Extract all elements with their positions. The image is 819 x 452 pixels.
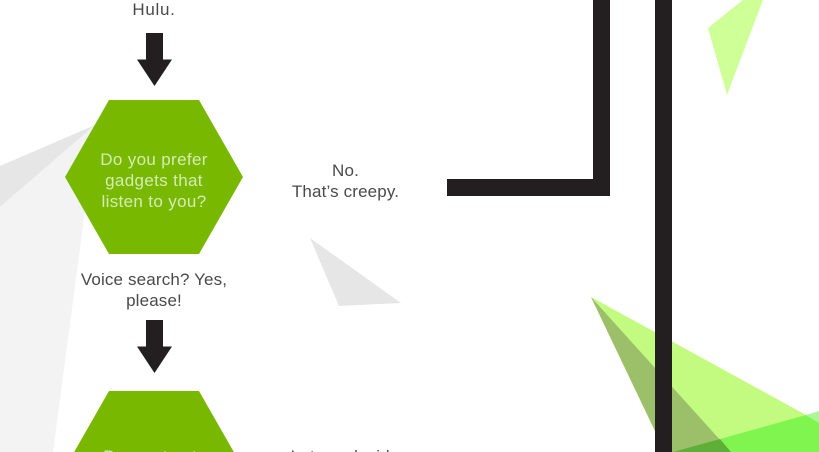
hexagon: next question (65, 391, 243, 452)
decor: central grey triangle (310, 238, 401, 306)
decor: left grey shards (0, 125, 95, 452)
arrow: Hulu to gadgets question (137, 33, 172, 86)
text: Voice search answer: please! (126, 291, 182, 310)
decor: top-right green shard (708, 0, 763, 95)
text: Voice search answer: Voice search? Yes, (81, 270, 227, 289)
decor: bottom-right green shards (591, 297, 819, 452)
text: gadgets question: gadgets that (105, 171, 203, 190)
connector: No path to right-hand line (447, 0, 610, 196)
text: Hulu answer: Hulu. (132, 0, 176, 19)
text: No answer: No. (332, 161, 359, 180)
connector: long vertical line (655, 0, 672, 452)
text: gadgets question: Do you prefer (100, 150, 208, 169)
arrow: voice search to next question (137, 320, 172, 373)
hexagon: gadgets question (65, 100, 243, 254)
text: No answer: That’s creepy. (292, 182, 399, 201)
text: gadgets question: listen to you? (101, 192, 207, 211)
